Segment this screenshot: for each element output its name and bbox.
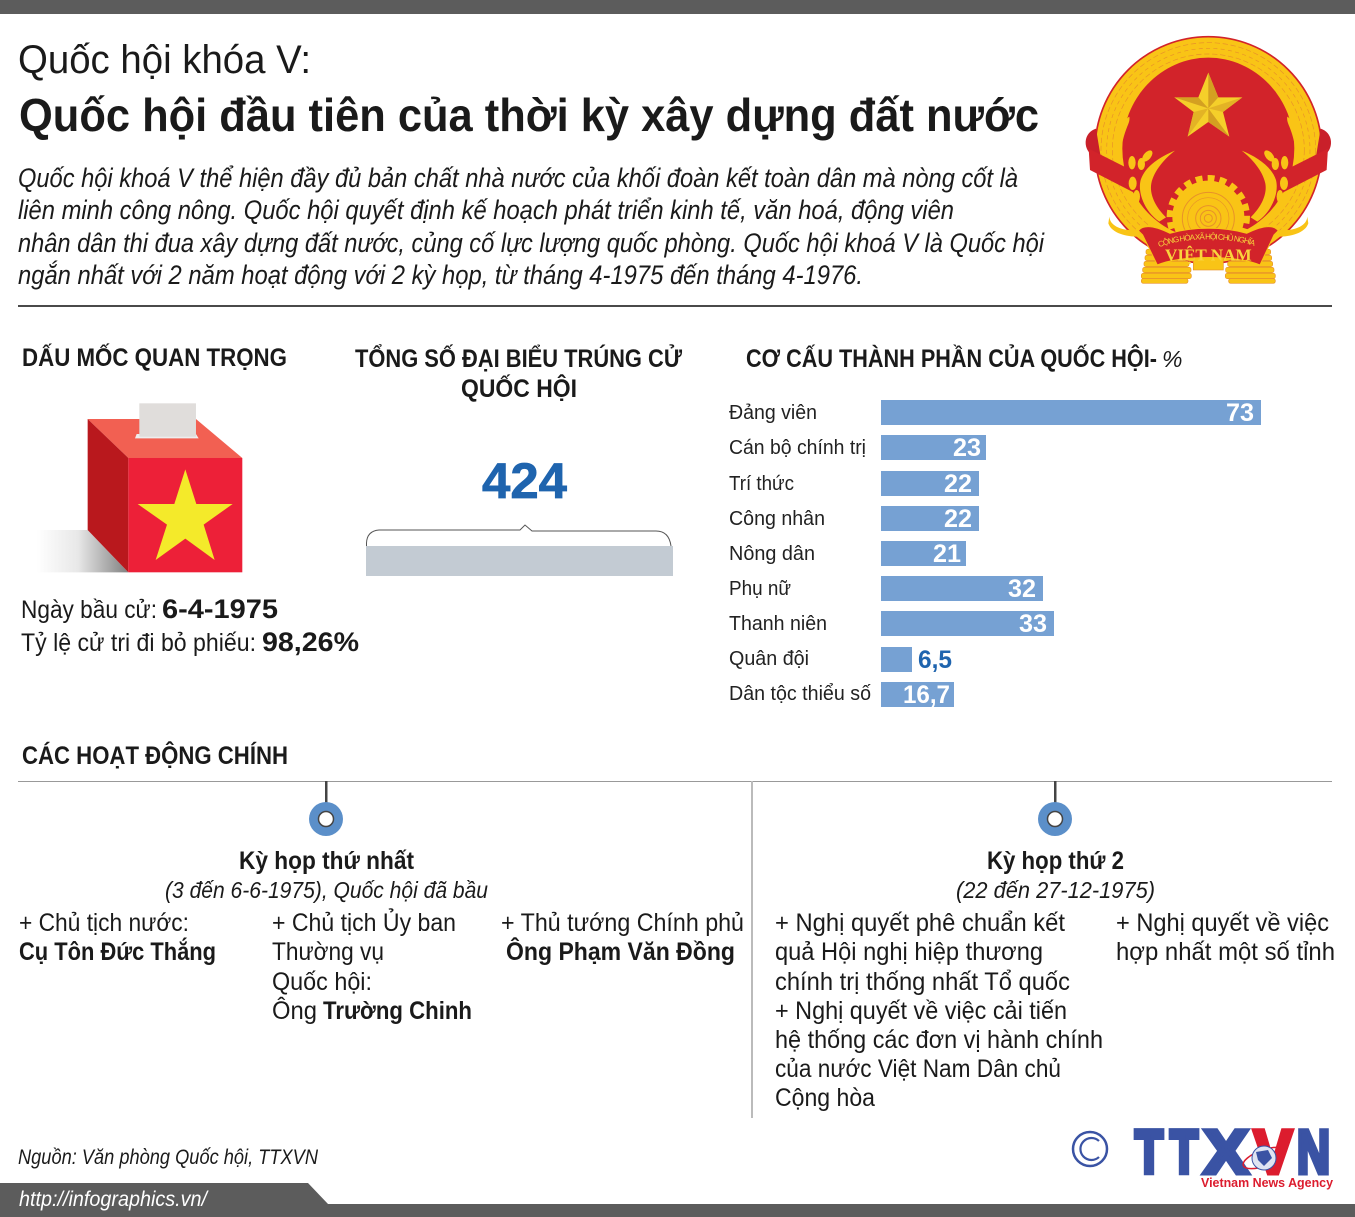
bar chart: 16,7 <box>903 681 950 709</box>
turnout: Tỷ lệ cử tri đi bỏ phiếu: <box>21 629 256 657</box>
resolutions left <box>775 909 1103 1112</box>
divider <box>18 305 1332 307</box>
panel: composition <box>729 343 1261 709</box>
resolutions right: hợp nhất một số tỉnh <box>1116 938 1335 966</box>
icon: national emblem: VIỆT NAM <box>1165 246 1252 265</box>
bar chart: 21 <box>933 540 961 568</box>
icon: timeline marker 2 <box>1038 781 1072 836</box>
resolutions right <box>1116 909 1335 966</box>
heading: composition: CƠ CẤU THÀNH PHẦN CỦA QUỐC HỘI- <box>746 343 1157 373</box>
icon: ballot box <box>37 403 242 572</box>
panel: milestones <box>21 342 359 657</box>
election date <box>21 594 278 624</box>
bar chart: Phụ nữ <box>729 578 791 600</box>
bar chart: 23 <box>953 434 981 462</box>
title: Quốc hội khóa V: <box>18 38 311 82</box>
president: Cụ Tôn Đức Thắng <box>19 936 216 966</box>
heading: total deputies: QUỐC HỘI <box>461 373 577 403</box>
heading: first session <box>165 847 488 903</box>
prime minister <box>501 909 744 966</box>
bar chart: 32 <box>1008 575 1036 603</box>
icon: copyright <box>1073 1132 1107 1166</box>
bar chart: Dân tộc thiểu số <box>729 683 871 705</box>
resolutions left: + Nghị quyết về việc cải tiến <box>775 997 1067 1025</box>
standing committee chair: Thường vụ <box>272 938 384 966</box>
resolutions left: + Nghị quyết phê chuẩn kết <box>775 909 1065 937</box>
number 424: 424 <box>482 453 567 509</box>
resolutions left: chính trị thống nhất Tổ quốc <box>775 968 1070 996</box>
prime minister: Ông Phạm Văn Đồng <box>506 936 735 966</box>
icon: timeline marker 1 <box>309 781 343 836</box>
resolutions left: Cộng hòa <box>775 1084 875 1112</box>
heading: total deputies: TỔNG SỐ ĐẠI BIỂU TRÚNG CỬ <box>355 343 682 373</box>
president: + Chủ tịch nước: <box>19 909 189 937</box>
footer bar <box>0 1183 1355 1217</box>
icon: national emblem: CỘNG HÒA XÃ HỘI CHỦ NGHĨA <box>1158 232 1254 246</box>
turnout: 98,26% <box>262 627 359 657</box>
bar chart: Công nhân <box>729 508 825 530</box>
standing committee chair: Quốc hội: <box>272 968 372 996</box>
source: Nguồn: Văn phòng Quốc hội, TTXVN <box>18 1146 319 1169</box>
bar chart <box>729 399 1261 709</box>
title <box>18 38 1039 141</box>
bar chart: 22 <box>944 470 972 498</box>
logo: TTXVN: T <box>1170 1118 1198 1186</box>
intro text block: Quốc hội khoá V thể hiện đầy đủ bản chất nhà nước của khối đoàn kết toàn dân mà nòng cốt là <box>18 163 1018 193</box>
heading: main activities: CÁC HOẠT ĐỘNG CHÍNH <box>22 740 288 770</box>
standing committee chair: Trường Chinh <box>323 997 472 1025</box>
title: Quốc hội đầu tiên của thời kỳ xây dựng đất nước <box>19 89 1039 141</box>
resolutions left: của nước Việt Nam Dân chủ <box>775 1055 1061 1083</box>
logo: TTXVN <box>1135 1118 1334 1190</box>
intro text block: nhân dân thi đua xây dựng đất nước, củng cố lực lượng quốc phòng. Quốc hội khoá V là Quốc hội <box>18 228 1045 258</box>
panel: second session <box>775 781 1335 1112</box>
logo: TTXVN: V <box>1254 1118 1292 1186</box>
president <box>19 909 216 966</box>
election date: 6-4-1975 <box>162 594 278 624</box>
bar chart: Nông dân <box>729 543 815 565</box>
bar chart: 33 <box>1019 610 1047 638</box>
bar chart: Thanh niên <box>729 613 827 635</box>
bar chart: Trí thức <box>729 473 794 495</box>
election date: Ngày bầu cử: <box>21 596 157 624</box>
bar chart: 22 <box>944 505 972 533</box>
panel: first session <box>19 781 744 1025</box>
standing committee chair <box>272 907 472 1025</box>
standing committee chair: Ông <box>272 996 317 1025</box>
resolutions left: quả Hội nghị hiệp thương <box>775 938 1043 966</box>
bar chart: Đảng viên <box>729 402 817 424</box>
logo: TTXVN: X <box>1204 1118 1248 1186</box>
bar chart: Cán bộ chính trị <box>729 437 866 459</box>
resolutions left: hệ thống các đơn vị hành chính <box>775 1026 1103 1054</box>
intro text block: ngắn nhất với 2 năm hoạt động với 2 kỳ họp, từ tháng 4-1975 đến tháng 4-1976. <box>18 259 863 290</box>
footer bar: http://infographics.vn/ <box>19 1188 209 1211</box>
heading: second session: (22 đến 27-12-1975) <box>956 877 1155 903</box>
prime minister: + Thủ tướng Chính phủ <box>501 909 744 937</box>
intro text block <box>18 163 1045 290</box>
top bar <box>0 0 1355 14</box>
resolutions right: + Nghị quyết về việc <box>1116 909 1329 937</box>
bar chart: 6,5 <box>918 646 952 674</box>
heading: second session <box>956 847 1155 903</box>
bracket <box>366 525 671 546</box>
heading: first session: Kỳ họp thứ nhất <box>239 847 415 875</box>
logo: TTXVN: N <box>1297 1118 1330 1186</box>
heading: total deputies <box>355 343 682 403</box>
bar chart: Quân đội <box>729 648 809 670</box>
logo: TTXVN: T <box>1135 1118 1163 1186</box>
heading: composition: % <box>1162 346 1182 372</box>
logo: TTXVN: Vietnam News Agency <box>1201 1175 1334 1190</box>
panel: total deputies <box>355 343 682 576</box>
bar: 424 seats <box>366 546 673 576</box>
intro text block: liên minh công nông. Quốc hội quyết định kế hoạch phát triển kinh tế, văn hoá, động viên <box>18 195 954 225</box>
heading: first session: (3 đến 6-6-1975), Quốc hội đã bầu <box>165 877 488 903</box>
icon: national emblem <box>1086 36 1331 284</box>
standing committee chair: + Chủ tịch Ủy ban <box>272 907 456 937</box>
bar chart: 73 <box>1226 399 1254 427</box>
heading: milestones: DẤU MỐC QUAN TRỌNG <box>22 342 287 372</box>
heading: second session: Kỳ họp thứ 2 <box>987 847 1124 875</box>
